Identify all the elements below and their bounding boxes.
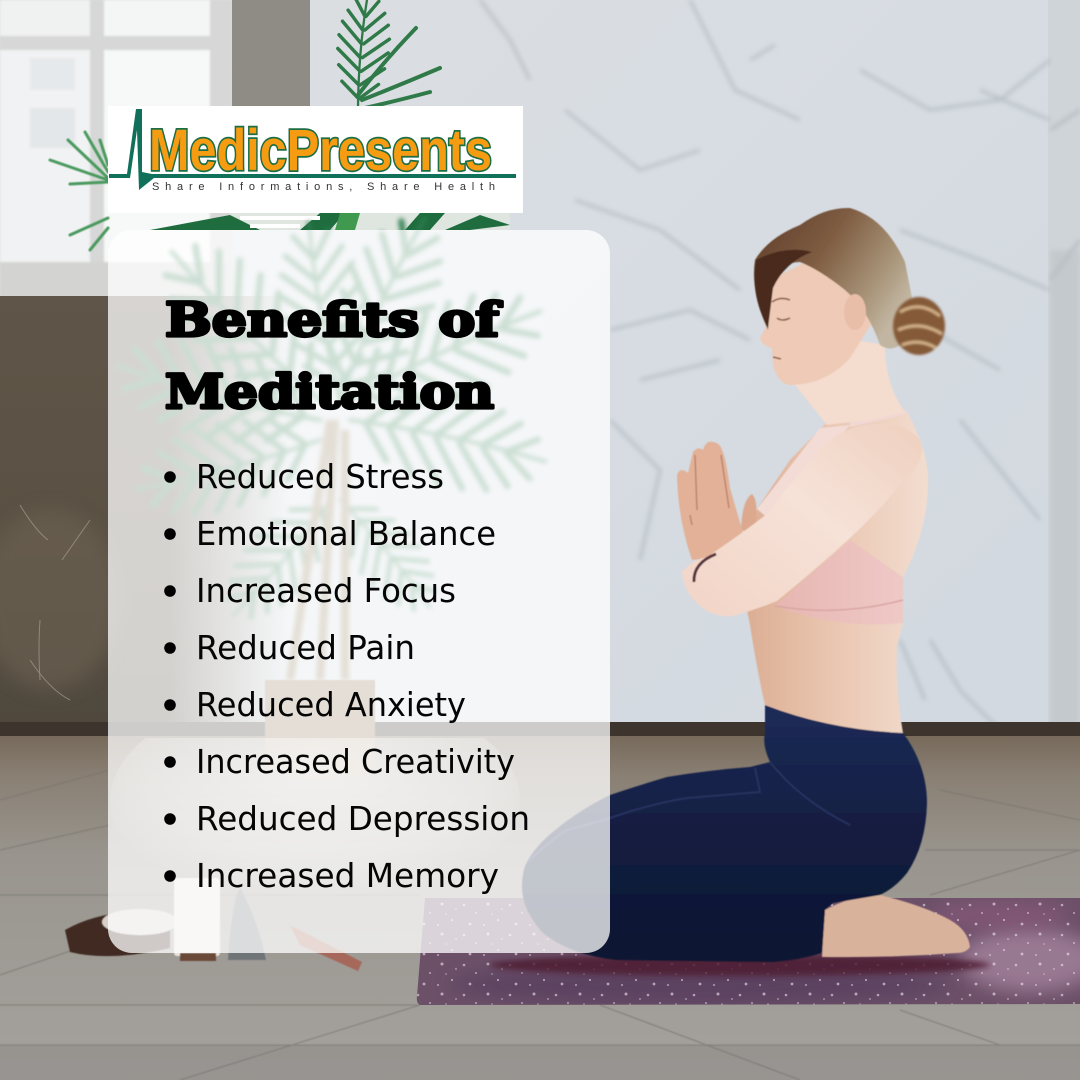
face [760,250,880,385]
finger lines [690,455,729,525]
benefits list: Reduced Stress [196,458,444,496]
leggings crease [528,762,850,862]
neck [795,335,905,425]
plant [50,0,560,680]
title: Meditation [165,365,494,420]
logo: tagline: Share Informations, Share Health [152,181,495,193]
background: marble wall [0,0,1080,735]
hair bun [893,297,945,355]
benefits list: Reduced Depression [196,800,530,838]
benefits list: Increased Focus [196,572,456,610]
plant: left frond [50,132,108,250]
logo [108,106,523,213]
torso [745,412,928,733]
bracelet [694,554,716,582]
foot [822,895,970,957]
hair [754,208,912,348]
far hand thumb [741,494,756,535]
eyebrow, eye and lips [772,298,790,359]
panel: brighter floor reflection [135,738,495,846]
plant: blurred palm [105,200,560,680]
arm [682,424,922,616]
yoga mat [415,896,1080,1006]
plant: strip under logo [150,213,510,230]
background: concrete wall [0,296,290,726]
woman in meditation pose [522,208,970,962]
logo: wordmark: MedicPresents [149,118,492,183]
title [165,293,502,420]
benefits list: Increased Memory [196,857,499,895]
translucent panel [108,230,610,953]
background: floor [0,722,1080,1080]
benefits list: Emotional Balance [196,515,496,553]
background: window [0,0,232,298]
ear [844,294,866,330]
benefits list [164,458,530,895]
title: Benefits of [165,293,502,348]
hands [677,442,743,560]
benefits list: Reduced Anxiety [196,686,466,724]
sports bra: strap [850,412,907,425]
benefits list: Increased Creativity [196,743,515,781]
benefits list: Reduced Pain [196,629,415,667]
sports bra: band [775,540,903,625]
plant: upper frond [333,0,440,110]
hair: dark fringe [754,250,812,328]
logo: ECG line [109,109,516,190]
leggings [522,705,927,962]
background: concrete column [232,0,310,110]
sports bra: chest [757,425,850,520]
vase and candles on the floor [65,680,375,971]
